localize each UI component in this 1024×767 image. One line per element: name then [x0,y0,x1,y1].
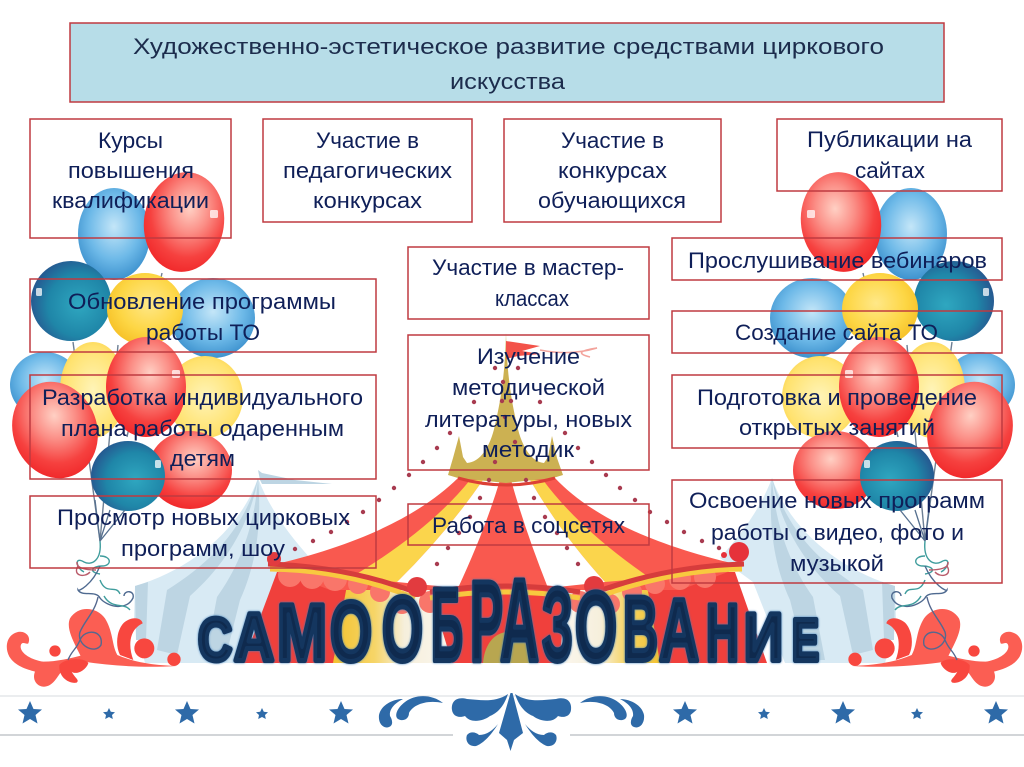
word art heading: З [542,568,573,684]
word art heading: В [623,578,658,680]
word art heading: А [659,580,699,680]
box: Курсы повышения квалификации: квалификации [52,188,209,213]
word art heading: С [198,606,232,674]
box: Освоение новых программ: работы с видео, фото и [711,520,964,545]
balloon highlights [36,210,218,468]
box: Прослушивание вебинаров: Прослушивание вебинаров [688,248,987,273]
right side tent [720,478,896,663]
box: Разработка индивидуального плана: детям [170,446,235,471]
title banner: искусства [450,69,566,94]
word art heading: И [744,600,783,676]
box: Курсы повышения квалификации [30,119,231,238]
box: Просмотр новых цирковых программ: Просмотр новых цирковых [57,505,350,530]
flag tail [540,348,597,357]
word art heading: Р [470,558,503,686]
centre mound [483,632,532,663]
word art heading: О [382,578,423,680]
balloon lower strings [95,500,125,541]
box: Изучение методической литературы: методик [482,437,574,462]
box: Просмотр новых цирковых программ [30,496,376,568]
box: Разработка индивидуального плана [30,375,376,479]
box: Подготовка и проведение открытых занятий: Подготовка и проведение [697,385,977,410]
box: Просмотр новых цирковых программ: программ, шоу [121,536,285,561]
balloon red low [148,431,232,509]
box: Создание сайта ТО [672,311,1002,353]
box: Участие в конкурсах обучающихся: конкурсах [558,158,667,183]
box: Участие в конкурсах обучающихся [504,119,721,222]
string light dots [293,366,721,566]
coral ornament right [848,609,1022,687]
box: Прослушивание вебинаров [672,238,1002,280]
box: Разработка индивидуального плана: Разработка индивидуального [42,385,363,410]
box: Подготовка и проведение открытых занятий: открытых занятий [739,415,935,440]
balloon teal [31,261,111,341]
box: Освоение новых программ: Освоение новых программ [689,488,985,513]
box: Создание сайта ТО: Создание сайта ТО [735,320,938,345]
swag knobs [267,552,281,566]
balloon pale yellow right [167,356,243,438]
box: Освоение новых программ [672,480,1002,583]
balloon bunch left [0,167,255,660]
balloon teal bottom [91,441,165,511]
word art heading: Н [706,588,739,678]
box: Участие в педагогических конкурсах [263,119,472,222]
word art heading: А [500,554,539,686]
balloon red left [0,370,111,490]
scallops [278,563,716,614]
box: Изучение методической литературы [408,335,649,470]
balloon red centre [106,337,186,437]
box: Освоение новых программ: музыкой [790,551,884,576]
canopy yellow stripes [350,480,483,582]
box: Изучение методической литературы: Изучение [477,344,580,369]
word art heading: О [330,584,372,678]
box: Обновление программы работы ТО [30,279,376,352]
coral ornament left [7,609,181,687]
balloon blue upper [78,188,150,280]
box: Участие в педагогических конкурсах: конкурсах [313,188,422,213]
box: Участие в конкурсах обучающихся: обучающихся [538,188,686,213]
word art heading: Б [431,568,463,684]
balloon blue right [171,278,255,358]
box: Курсы повышения квалификации: Курсы [98,128,163,153]
word art heading: О [575,572,617,682]
box: Подготовка и проведение открытых занятий [672,375,1002,448]
box: Обновление программы работы ТО: Обновление программы [68,289,336,314]
crown and spire [448,333,563,483]
stars [18,701,1008,724]
title banner: Художественно-эстетическое развитие средствами циркового [133,34,884,59]
box: Изучение методической литературы: методической [452,375,605,400]
word art heading: А [234,600,274,676]
ribbon curls [68,541,133,660]
title banner [70,23,944,102]
entrance wall [243,572,767,663]
box: Публикации на сайтах: сайтах [855,158,925,183]
box: Изучение методической литературы: литературы, новых [425,407,632,432]
central circus tent [243,333,767,663]
balloon pale yellow left [60,342,126,438]
bottom ribbon band [0,696,1024,735]
balloon bunch right [770,167,1024,660]
box: Работа в соцсетях: Работа в соцсетях [432,513,625,538]
box: Участие в мастер-классах [408,247,649,319]
balloon yellow [107,273,183,345]
entrance drapes [333,585,452,663]
canopy outer [268,478,744,590]
box: Работа в соцсетях [408,504,649,545]
box: Участие в педагогических конкурсах: Участие в [316,128,419,153]
canopy white stripes [397,480,500,588]
box: Участие в мастер-классах: классах [495,286,569,311]
balloon red top [137,167,231,277]
box: Разработка индивидуального плана: плана работы одаренным [61,416,344,441]
word art heading: Е [792,608,819,674]
word art heading: М [277,588,327,678]
balloon blue low [10,352,80,418]
flag [506,341,541,359]
box: Курсы повышения квалификации: повышения [68,158,194,183]
swag bands [270,569,415,598]
box: Публикации на сайтах: Публикации на [807,127,973,152]
centre blue ornament [379,693,644,751]
box: Публикации на сайтах [777,119,1002,191]
balloon strings [73,273,162,541]
crown rim [458,478,555,485]
box: Участие в мастер-классах: Участие в мастер- [432,255,624,280]
left side tent [134,470,332,663]
box: Участие в конкурсах обучающихся: Участие в [561,128,664,153]
box: Участие в педагогических конкурсах: педагогических [283,158,452,183]
box: Обновление программы работы ТО: работы ТО [146,320,260,345]
